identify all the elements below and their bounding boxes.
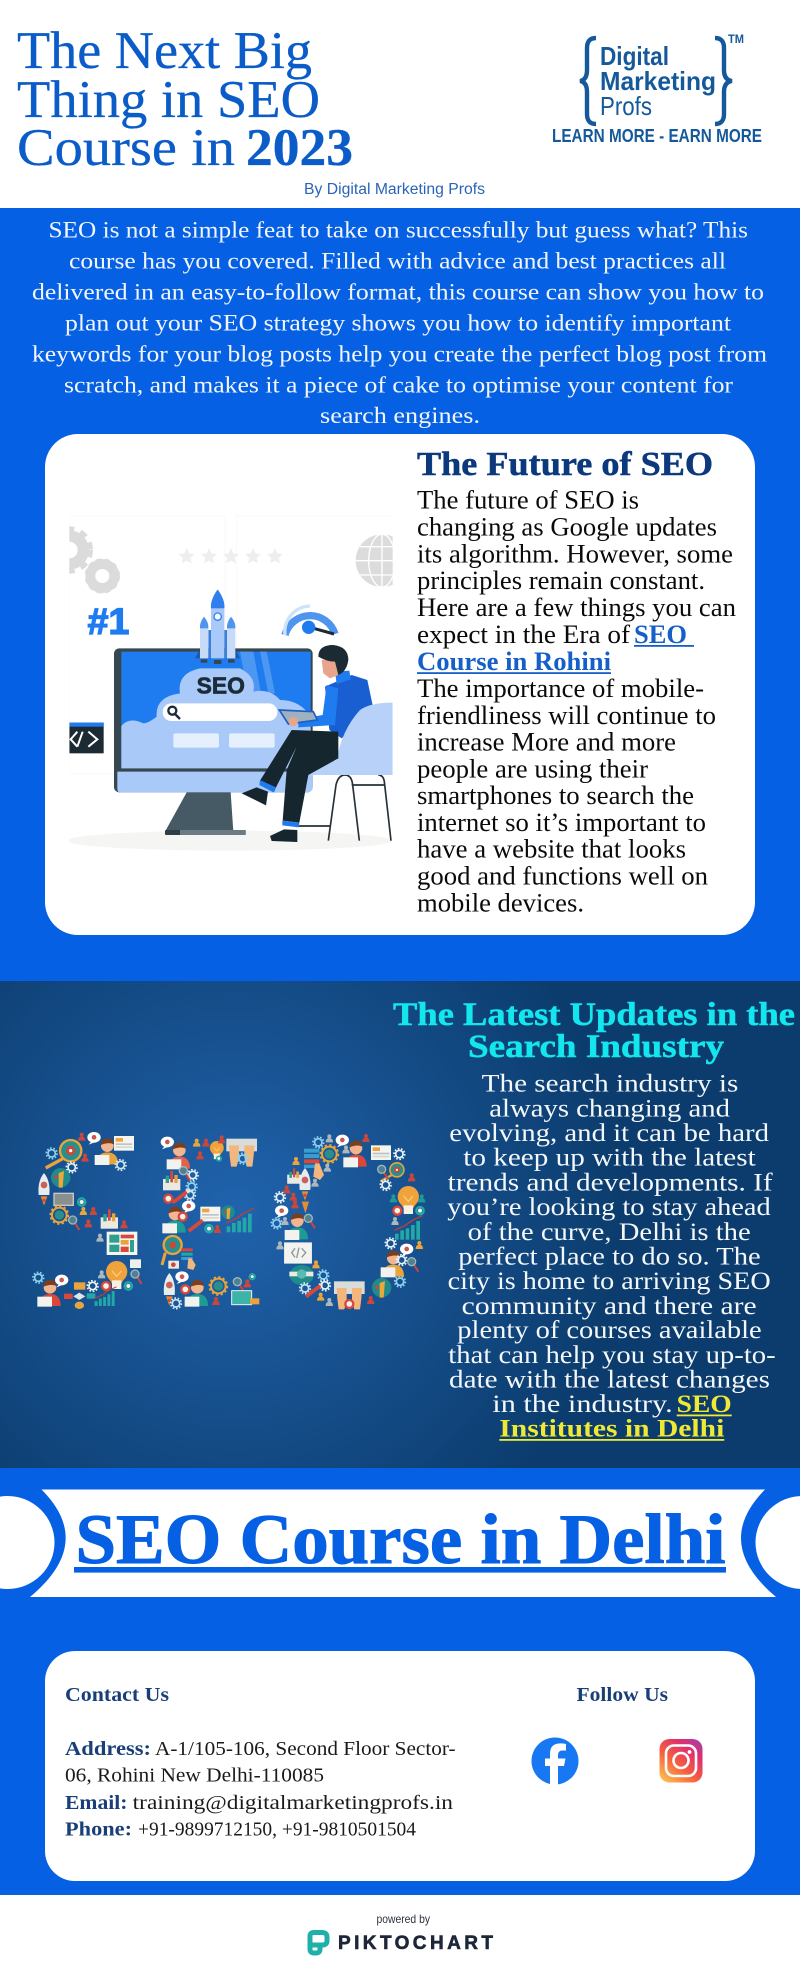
body text: latest updates: date with the latest changes — [449, 1364, 770, 1394]
footer: powered by Piktochart — [310, 1912, 493, 1954]
intro paragraph: delivered in an easy-to-follow format, this course can show you how to — [32, 280, 764, 304]
title: The Next Big — [17, 22, 312, 80]
body text: future of SEO: smartphones to search the — [417, 780, 694, 810]
body text: latest updates: to keep up with the latest — [463, 1143, 756, 1172]
body text: latest updates: community and there are — [462, 1291, 757, 1320]
body text: latest updates: in the industry. — [492, 1389, 673, 1418]
body text: future of SEO: friendliness will continue to — [417, 700, 716, 730]
body text: future of SEO: The importance of mobile- — [417, 673, 704, 703]
intro paragraph: search engines. — [320, 403, 480, 428]
body text: future of SEO: internet so it’s important to — [417, 807, 706, 837]
body text: latest updates: trends and developments. If — [448, 1168, 773, 1196]
title — [17, 22, 353, 177]
letter O icons — [271, 1134, 425, 1309]
body text: future of SEO: good and functions well on — [417, 860, 708, 890]
logo: Digital Marketing Profs: Marketing — [600, 66, 716, 96]
contact details: +91-9899712150, +91-9810501504 — [138, 1819, 416, 1841]
logo: Digital Marketing Profs: Profs — [600, 91, 652, 121]
icon: facebook — [532, 1738, 578, 1785]
logo: Digital Marketing Profs: TM — [728, 34, 744, 46]
contact details: training@digitalmarketingprofs.in — [133, 1792, 453, 1814]
header section — [17, 22, 762, 198]
contact us heading: Contact Us — [65, 1684, 169, 1706]
body text: latest updates: city is home to arriving SEO — [448, 1266, 771, 1295]
contact details: A-1/105-106, Second Floor Sector- — [155, 1738, 456, 1760]
letter S icons — [33, 1132, 142, 1309]
illustration: SEO rocket and person at computer: #1 — [88, 600, 129, 642]
body text: future of SEO: people are using their — [417, 754, 648, 784]
panel: latest updates in the search industry — [0, 981, 800, 1468]
letter E icons — [161, 1135, 259, 1309]
body text: future of SEO: expect in the Era of — [417, 619, 630, 649]
body text: latest updates: that can help you stay up-to- — [448, 1340, 776, 1369]
body text: latest updates: you’re looking to stay ahead — [447, 1192, 771, 1221]
body text: future of SEO: changing as Google updates — [417, 512, 717, 542]
logo: Digital Marketing Profs: Digital — [600, 41, 669, 71]
byline: By Digital Marketing Profs — [304, 181, 485, 198]
contact details — [65, 1738, 456, 1841]
intro paragraph: course has you covered. Filled with advice and best practices all — [69, 248, 726, 274]
icon: Piktochart logo — [310, 1932, 327, 1953]
body text: latest updates: of the curve, Delhi is the — [468, 1217, 751, 1246]
body text: latest updates — [447, 1069, 776, 1443]
banner title: SEO Course in Delhi — [76, 1501, 726, 1579]
contact details: 06, Rohini New Delhi-110085 — [65, 1765, 324, 1787]
body text: latest updates: The search industry is — [482, 1069, 738, 1098]
body text: future of SEO: Course in Rohini — [417, 646, 611, 676]
banner: SEO Course in Delhi — [0, 1490, 800, 1597]
illustration: SEO rocket and person at computer — [69, 526, 393, 850]
contact details: Phone: — [65, 1819, 132, 1841]
panel: the future of SEO — [45, 434, 755, 935]
body text: future of SEO — [417, 484, 736, 918]
heading: The Future of SEO: The Future of SEO — [417, 446, 713, 483]
title: 2023 — [246, 119, 353, 177]
illustration: SEO letters built from icons — [33, 1132, 425, 1309]
powered by label: powered by — [376, 1912, 430, 1926]
intro paragraph: plan out your SEO strategy shows you how to identify important — [65, 310, 732, 336]
body text: future of SEO: have a website that looks — [417, 834, 686, 864]
body text: future of SEO: principles remain constant. — [417, 565, 705, 595]
contact details: Email: — [65, 1792, 128, 1814]
intro paragraph: keywords for your blog posts help you create the perfect blog post from — [32, 342, 767, 366]
body text: latest updates: evolving, and it can be hard — [449, 1118, 769, 1147]
Piktochart wordmark: PIKTOCHART — [338, 1933, 493, 1954]
body text: future of SEO: mobile devices. — [417, 888, 584, 918]
heading: the latest updates — [393, 997, 795, 1065]
body text: latest updates: always changing and — [489, 1094, 730, 1122]
contact details: Address: — [65, 1738, 151, 1760]
title: Course in — [17, 119, 235, 177]
intro paragraph: SEO is not a simple feat to take on successfully but guess what? This — [48, 218, 748, 242]
body text: latest updates: SEO — [677, 1389, 732, 1418]
logo: Digital Marketing Profs: LEARN MORE - EARN MORE — [552, 126, 762, 146]
heading: the latest updates: Search Industry — [468, 1029, 725, 1065]
body text: future of SEO: increase More and more — [417, 726, 676, 756]
illustration: SEO rocket and person at computer: SEO — [197, 672, 245, 698]
body text: future of SEO: Here are a few things you can — [417, 592, 736, 622]
follow us heading: Follow Us — [576, 1684, 668, 1706]
title: Thing in SEO — [17, 71, 320, 129]
icon: instagram — [660, 1739, 702, 1782]
body text: future of SEO: The future of SEO is — [417, 484, 639, 514]
body text: latest updates: plenty of courses available — [457, 1315, 762, 1344]
heading: the latest updates: The Latest Updates in the — [393, 997, 795, 1033]
intro paragraph — [32, 218, 767, 428]
body text: future of SEO: its algorithm. However, some — [417, 538, 733, 568]
intro paragraph: scratch, and makes it a piece of cake to optimise your content for — [64, 372, 733, 398]
body text: latest updates: Institutes in Delhi — [499, 1414, 724, 1443]
body text: future of SEO: SEO — [634, 619, 687, 649]
body text: latest updates: perfect place to do so. The — [458, 1242, 761, 1270]
logo: Digital Marketing Profs — [552, 34, 762, 146]
panel: contact and follow — [45, 1651, 755, 1881]
